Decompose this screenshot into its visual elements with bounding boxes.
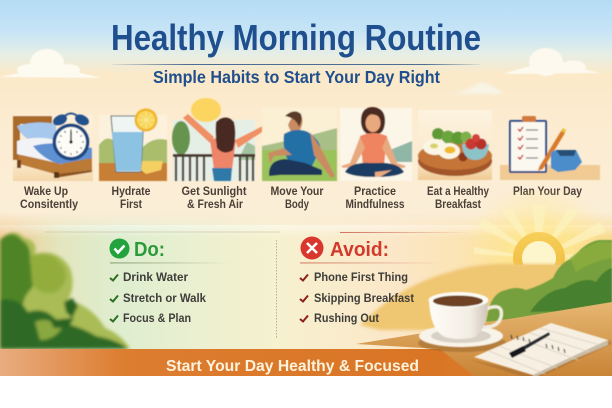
- label: Breakfast: [435, 199, 481, 211]
- icon: man stretching on grass: [262, 108, 337, 181]
- label: Move Your: [270, 186, 324, 198]
- step 5: practice mindfulness: [340, 107, 412, 211]
- icon: woman meditating: [340, 107, 412, 181]
- notebook and pen: [470, 323, 612, 380]
- label: First: [120, 199, 142, 211]
- table: [356, 302, 612, 376]
- check items: [110, 274, 118, 322]
- label: Mindfulness: [346, 199, 404, 211]
- avoid item text: Skipping Breakfast: [314, 291, 414, 305]
- step 4: move your body: [262, 108, 337, 211]
- label: Plan Your Day: [513, 186, 583, 198]
- do item text: Drink Water: [123, 270, 188, 284]
- icon: woman at balcony with arms raised: [172, 98, 268, 181]
- heading: do: Do:: [134, 239, 165, 261]
- step 1: wake up consistently: [13, 112, 93, 211]
- icon: red x circle: [300, 236, 324, 260]
- panel: do list: [110, 238, 232, 325]
- cloud right: [504, 48, 600, 76]
- subtitle: Simple Habits to Start Your Day Right: [153, 67, 440, 87]
- distant hills: [360, 264, 570, 330]
- coffee cup on saucer: [418, 292, 506, 352]
- icon: clipboard checklist and pen: [500, 116, 600, 180]
- label: Practice: [354, 186, 396, 198]
- divider: [276, 240, 278, 338]
- label: Get Sunlight: [182, 186, 247, 198]
- avoid item text: Rushing Out: [314, 311, 379, 325]
- cloud small: [452, 82, 504, 94]
- top rule: [45, 231, 280, 233]
- label: Eat a Healthy: [427, 186, 490, 198]
- label: Hydrate: [112, 186, 150, 198]
- do item text: Focus & Plan: [123, 311, 191, 325]
- label: Body: [285, 199, 310, 211]
- heading: avoid: Avoid:: [330, 239, 389, 261]
- label: Consitently: [20, 199, 79, 211]
- title: Healthy Morning Routine: [111, 17, 481, 58]
- cloud left: [0, 49, 102, 78]
- do item text: Stretch or Walk: [123, 291, 206, 305]
- do underline: [110, 262, 232, 264]
- sun with rays: [474, 190, 606, 265]
- background sky: [0, 0, 612, 225]
- avoid item text: Phone First Thing: [314, 270, 408, 284]
- icon: bed and alarm clock: [13, 112, 93, 181]
- step 3: get sunlight and fresh air: [172, 98, 268, 211]
- check items: [300, 274, 308, 322]
- label: Wake Up: [24, 186, 68, 198]
- step 7: plan your day: [500, 116, 600, 198]
- orange footer band: [0, 349, 612, 376]
- left tree: [0, 232, 130, 349]
- icon: green check circle: [110, 238, 130, 258]
- icon: glass of water with lemon: [99, 108, 167, 181]
- footer text: Start Your Day Healthy & Focused: [166, 358, 419, 375]
- avoid underline: [300, 262, 445, 264]
- hills right: [486, 240, 612, 322]
- title underline: [112, 63, 480, 66]
- avoid header rule: [340, 231, 470, 234]
- step 6: eat a healthy breakfast: [418, 110, 492, 211]
- icon: breakfast plate: [418, 110, 492, 180]
- label: & Fresh Air: [187, 199, 243, 211]
- lower panel background: [0, 212, 612, 352]
- step 2: hydrate first: [99, 108, 167, 211]
- panel: avoid list: [300, 232, 470, 325]
